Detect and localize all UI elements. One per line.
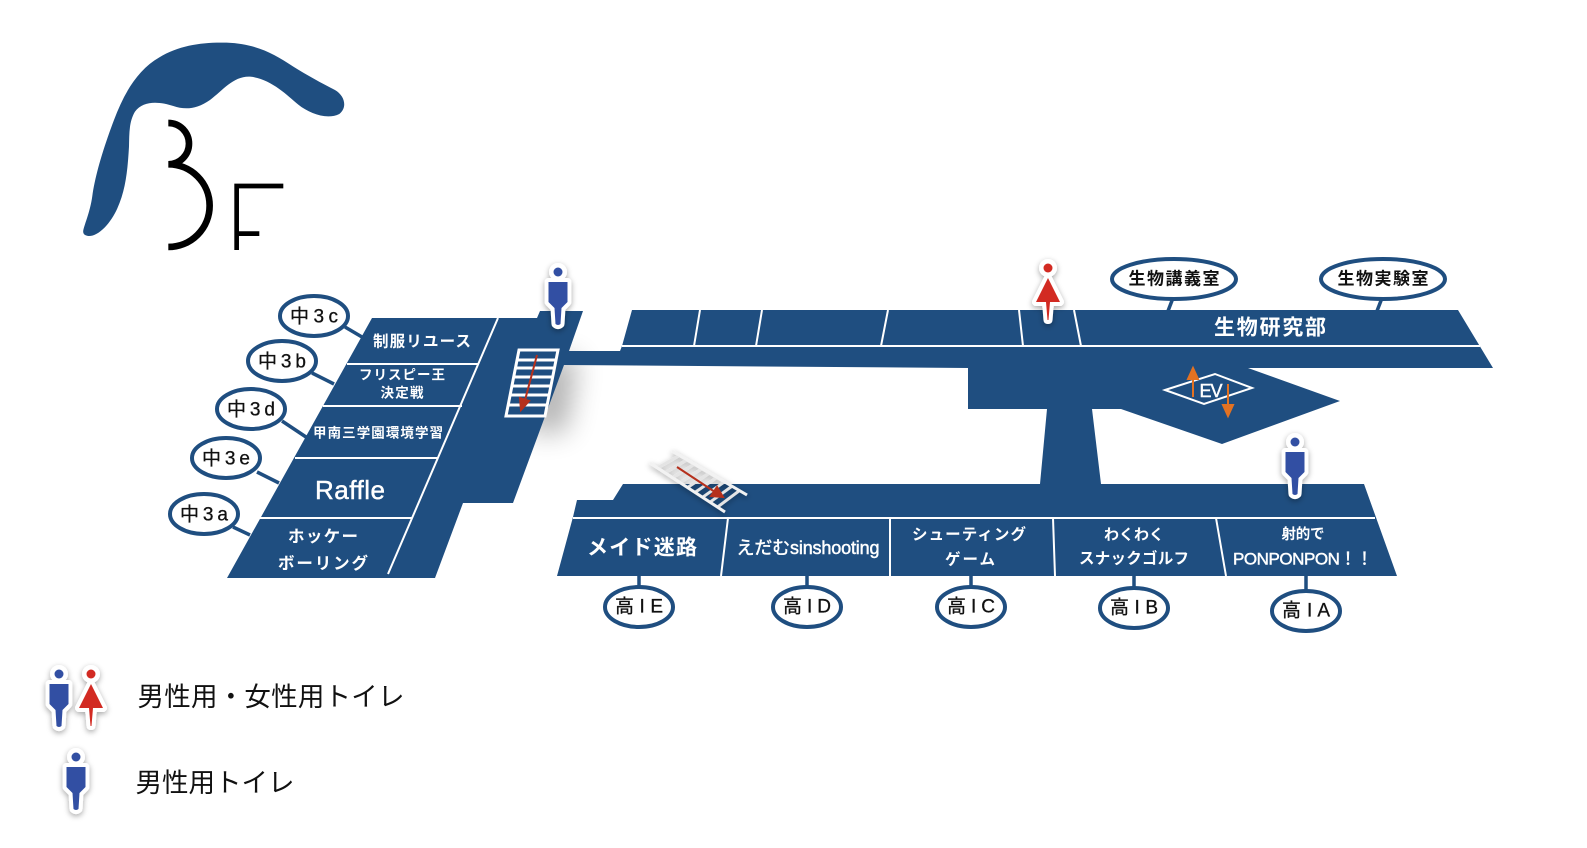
- class bubbles: lower corridor: [605, 576, 1340, 631]
- shadow beside stairs: [526, 358, 578, 432]
- bubble: 高1D: [773, 576, 841, 627]
- bubble: 中3d: 中 3 d: [227, 398, 275, 420]
- room dividers: [260, 310, 1480, 576]
- bubble: 中3a: [170, 494, 250, 535]
- stairs: left wing: [506, 350, 558, 416]
- elevator: [1165, 368, 1252, 416]
- bubble: 中3e: [192, 438, 279, 483]
- legend text: men's toilet: 男性用トイレ: [136, 768, 294, 798]
- bubble: 中3b: [248, 341, 334, 384]
- lab bubbles: [1112, 259, 1445, 311]
- room: 制服リユース: 制服リユース: [373, 332, 471, 350]
- bubble: 中3c: [280, 296, 362, 337]
- bubble: 生物講義室: [1112, 259, 1236, 311]
- room: 決定戦: 決定戦: [380, 384, 424, 400]
- ladder treads and rails: [650, 451, 747, 512]
- legend: [50, 665, 404, 810]
- bubble: 高1B: 高 I B: [1110, 596, 1158, 618]
- bubble: 高1A: 高 I A: [1282, 600, 1330, 622]
- logo numeral 3: [168, 123, 210, 247]
- room: PONPONPON！！: PONPONPON！！: [1233, 550, 1373, 568]
- icon: women's toilet, upper corridor: [1036, 259, 1060, 320]
- bubble: 中3c: 中 3 c: [290, 306, 338, 328]
- logo letter F: [237, 186, 283, 250]
- room: 生物研究部: 生物研究部: [1214, 316, 1326, 340]
- stair frame and treads: [506, 350, 558, 416]
- ladder direction arrow: [677, 467, 723, 497]
- legend icon: men's toilet: [50, 665, 68, 727]
- room: 射的で: 射的で: [1282, 525, 1324, 543]
- room: えだむsinshooting: えだむsinshooting: [736, 538, 880, 558]
- bubble: 高1E: [605, 576, 673, 627]
- bubble: 生物講義室: 生物講義室: [1128, 270, 1220, 288]
- logo blue swoosh: [83, 43, 344, 236]
- bubble: 中3a: 中 3 a: [180, 504, 228, 526]
- lower corridor room labels: [587, 524, 1373, 568]
- elevator diamond: [1165, 374, 1252, 404]
- room: メイド迷路: メイド迷路: [587, 536, 697, 560]
- room: わくわく: わくわく: [1104, 526, 1164, 544]
- icon: men's toilet, lower corridor: [1286, 433, 1304, 495]
- room: 甲南三学園環境学習: 甲南三学園環境学習: [313, 424, 443, 440]
- elevator label: EV: [1200, 381, 1222, 401]
- bubble: 生物実験室: 生物実験室: [1338, 270, 1428, 288]
- bubble: 高1C: [937, 576, 1005, 627]
- legend icon: men's toilet only: [66, 748, 86, 810]
- room: ホッケー: ホッケー: [288, 527, 358, 546]
- legend text: both toilets: 男性用・女性用トイレ: [138, 682, 404, 712]
- room: ゲーム: ゲーム: [945, 550, 995, 568]
- bubble: 高1B: [1100, 576, 1168, 628]
- stair direction arrow: [520, 355, 537, 410]
- bubble: 中3d: [217, 389, 306, 437]
- room: シューティング: シューティング: [912, 524, 1026, 544]
- floor plan: building shapes: [227, 310, 1493, 578]
- bubble: 高1D: 高 I D: [783, 596, 831, 618]
- logo: 3F floor mark: [83, 43, 344, 250]
- down arrow: [1223, 384, 1233, 416]
- room: フリスピー王: フリスピー王: [359, 368, 445, 382]
- room: Raffle: Raffle: [315, 475, 385, 505]
- bubble: 高1E: 高 I E: [615, 596, 663, 618]
- room: ボーリング: ボーリング: [278, 553, 368, 573]
- building floor outline: [227, 310, 1493, 578]
- bubble: 生物実験室: [1321, 259, 1445, 311]
- bubble: 中3b: 中 3 b: [258, 350, 306, 372]
- bubble: 高1A: [1272, 576, 1340, 631]
- icon: men's toilet, left wing: [548, 263, 568, 325]
- stairs: lower corridor: [650, 451, 747, 512]
- up arrow: [1188, 368, 1198, 397]
- left wing room labels: [278, 332, 471, 573]
- legend icon: women's toilet: [79, 665, 103, 726]
- bubble: 中3e: 中 3 e: [202, 448, 250, 470]
- bubble: 高1C: 高 I C: [947, 596, 995, 618]
- class bubbles: left wing: [170, 296, 362, 535]
- room: スナックゴルフ: スナックゴルフ: [1079, 548, 1189, 568]
